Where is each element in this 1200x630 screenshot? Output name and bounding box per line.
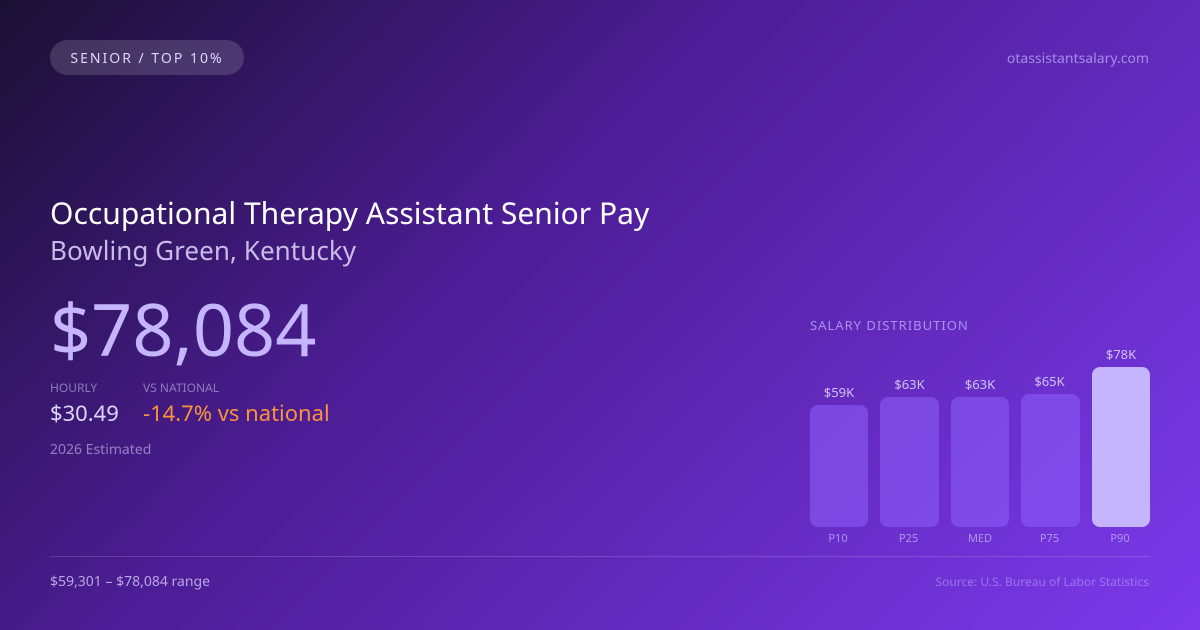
MED bar <box>951 397 1009 527</box>
vs national label: VS NATIONAL <box>143 379 219 396</box>
P90 value: $78K <box>1106 345 1136 363</box>
P75 label: P75 <box>1040 531 1059 546</box>
subtitle: location: Bowling Green, Kentucky <box>50 232 356 268</box>
hourly label: HOURLY <box>50 379 97 396</box>
chart heading: SALARY DISTRIBUTION <box>810 316 969 334</box>
source note: Source: U.S. Bureau of Labor Statistics <box>936 573 1149 590</box>
badge: senior / top 10%: SENIOR / TOP 10% <box>70 49 224 68</box>
P90 bar <box>1092 367 1150 527</box>
vs national value: -14.7% vs national <box>143 398 330 428</box>
MED value: $63K <box>965 375 995 393</box>
MED label: MED <box>968 531 992 546</box>
stat: vs national <box>143 379 330 428</box>
title: Occupational Therapy Assistant Senior Pay <box>50 192 649 233</box>
P25 value: $63K <box>894 375 925 393</box>
P25 label: P25 <box>899 531 918 546</box>
P90 label: P90 <box>1110 531 1130 546</box>
site domain: otassistantsalary.com <box>1007 49 1149 68</box>
salary range: $59,301 – $78,084 range <box>50 572 210 591</box>
P75 value: $65K <box>1034 372 1065 390</box>
P25 bar <box>880 397 939 527</box>
P75 bar <box>1021 394 1080 527</box>
badge: senior / top 10% <box>50 40 244 75</box>
stat: hourly <box>50 379 119 428</box>
P10 bar <box>810 405 868 527</box>
bar chart: salary distribution <box>810 316 1150 546</box>
hourly value: $30.49 <box>50 398 119 428</box>
P10 label: P10 <box>828 531 848 546</box>
headline salary: $78,084 <box>50 280 316 378</box>
P10 value: $59K <box>824 383 854 401</box>
year note: 2026 Estimated <box>50 440 151 459</box>
